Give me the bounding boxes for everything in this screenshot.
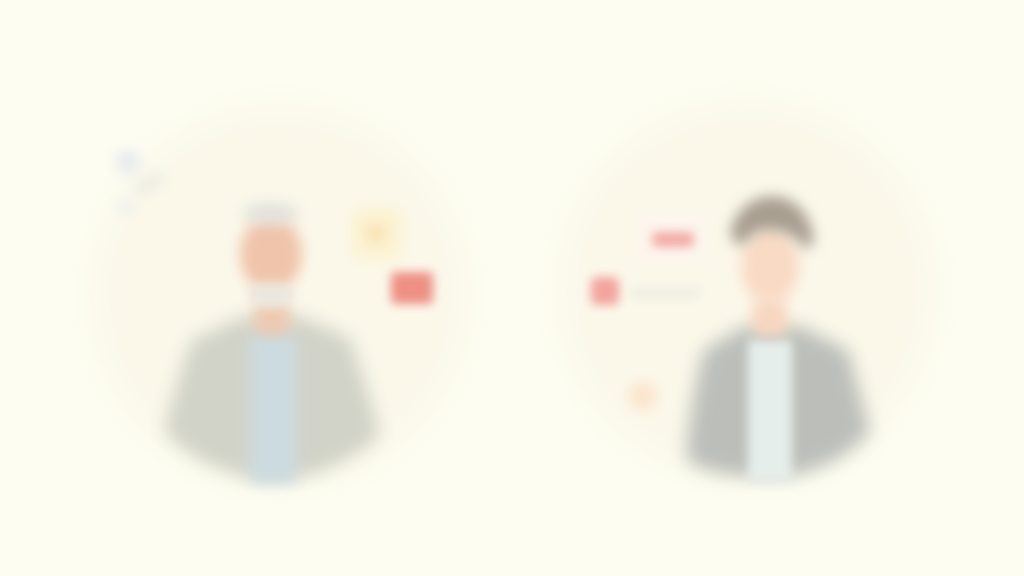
face	[240, 216, 302, 292]
figure: younger person	[686, 196, 870, 482]
beard	[247, 282, 295, 308]
icon: scattered marks upper left	[116, 150, 165, 216]
hair	[730, 196, 814, 249]
shirt	[250, 335, 296, 483]
icon: speech bubble with red label	[638, 214, 704, 264]
jacket	[164, 316, 380, 478]
figure: older man	[164, 203, 380, 483]
jacket	[686, 326, 870, 476]
neck	[254, 300, 290, 334]
neck	[753, 298, 787, 336]
icon: red square with caption line	[591, 277, 700, 305]
panel: right portrait circle	[547, 90, 947, 490]
icon: pale orange mark	[629, 382, 657, 410]
icon: yellow note	[352, 208, 402, 260]
hair	[243, 203, 299, 225]
icon: red envelope	[391, 272, 433, 304]
face	[741, 228, 799, 304]
shirt	[748, 340, 792, 482]
panel: left portrait circle	[80, 95, 480, 495]
